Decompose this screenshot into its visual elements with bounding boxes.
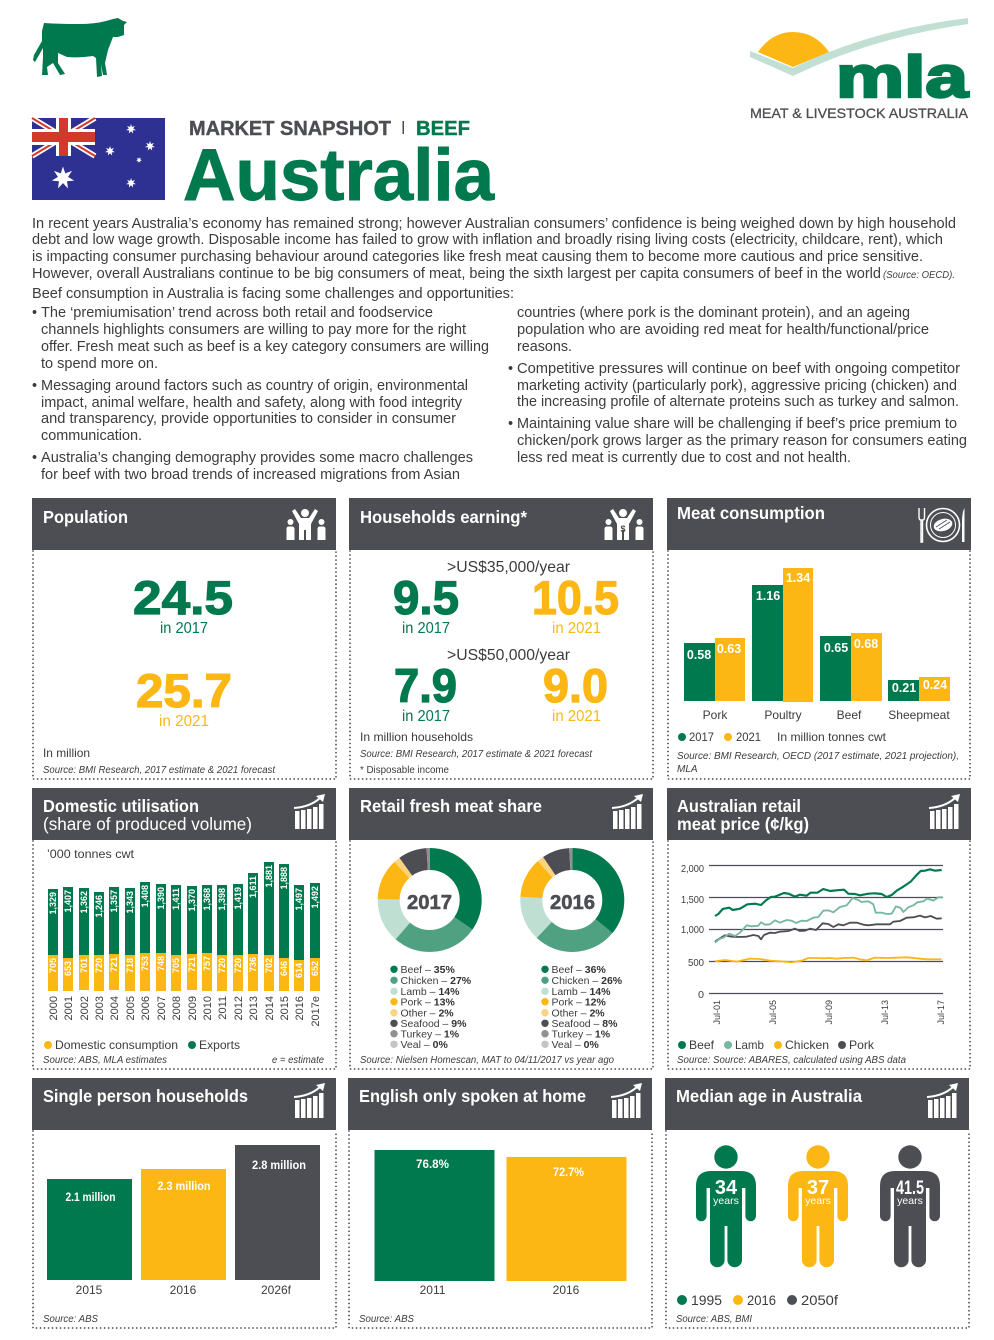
line chart: retail meat prices: Jul-01: [712, 1000, 722, 1025]
source: Source: ABS: [43, 1314, 98, 1325]
legend: 2016: Beef – 36%: [552, 964, 606, 976]
text block: right bullets: Competitive pressures will continue on beef with ongoing competitor: [517, 361, 960, 377]
title: MARKET SNAPSHOT: [189, 118, 391, 140]
text block: right bullets: population who are avoiding red meat for health/functional/price: [517, 322, 929, 338]
stacked bar chart: domestic and exports: [48, 862, 322, 1027]
stacked bar chart: domestic and exports: 1,881: [264, 865, 274, 888]
source: e = estimate: [272, 1055, 324, 1066]
text block: right bullets: countries (where pork is the dominant protein), and an ageing: [517, 305, 910, 321]
legend: 2021: [736, 730, 761, 744]
icon: rising chart: [927, 1083, 958, 1118]
icon: people: [286, 509, 326, 540]
bar chart: households: 2026f: [261, 1283, 292, 1297]
bar chart: meat consumption: 1.34: [786, 571, 810, 585]
source: Source: ABS, MLA estimates: [43, 1055, 167, 1066]
source: MLA: [677, 764, 698, 775]
heading: domestic utilisation: (share of produced volume): [43, 814, 252, 834]
logo: MLA: [750, 18, 969, 121]
stacked bar chart: domestic and exports: 2014: [264, 996, 276, 1020]
legend: 2017: Pork – 13%: [400, 996, 455, 1008]
stacked bar chart: domestic and exports: 757: [202, 956, 212, 971]
legend: In million tonnes cwt: [777, 730, 887, 744]
stacked bar chart: domestic and exports: 2007: [156, 996, 168, 1020]
text block: introduction: [32, 216, 956, 302]
legend: 2016: Other – 2%: [552, 1008, 605, 1020]
legend: [678, 1038, 875, 1052]
line chart: retail meat prices: Jul-09: [824, 1000, 834, 1025]
text block: left bullets: [32, 305, 489, 483]
line chart: retail meat prices: 500: [688, 957, 704, 969]
stats: above US$35,000: [393, 559, 619, 637]
panel: retail fresh meat share: [349, 788, 653, 1069]
icon: rising chart: [294, 794, 325, 829]
stats: above US$35,000: in 2021: [552, 620, 601, 637]
legend: 2017: Lamb – 14%: [400, 986, 460, 998]
stacked bar chart: domestic and exports: 705: [48, 958, 58, 973]
legend: 2017: Veal – 0%: [400, 1039, 448, 1051]
text block: left bullets: Australia’s changing demography provides some macro challenges: [41, 450, 473, 466]
panel: english only spoken at home: [348, 1078, 652, 1328]
line chart: retail meat prices: Jul-17: [936, 1000, 946, 1025]
text block: left bullets: to spend more on.: [41, 356, 158, 372]
stacked bar chart: domestic and exports: 2006: [140, 996, 152, 1020]
stats: above US$50,000: 9.0: [543, 659, 608, 712]
source: [677, 751, 959, 775]
panel: australian retail meat price: [667, 788, 971, 1069]
stacked bar chart: domestic and exports: 702: [264, 958, 274, 973]
text block: left bullets: communication.: [41, 428, 142, 444]
stacked bar chart: domestic and exports: 1,611: [248, 876, 258, 898]
stacked bar chart: domestic and exports: 2002: [79, 996, 91, 1020]
text block: right bullets: •: [508, 361, 513, 377]
donut chart: 2017: 2017: [407, 891, 452, 914]
stacked bar chart: domestic and exports: 2000: [48, 996, 60, 1020]
stacked bar chart: domestic and exports: 1,357: [109, 890, 119, 913]
heading: domestic utilisation: [43, 796, 252, 834]
icon: rising chart: [612, 794, 643, 829]
figure: 2050 median age: years: [897, 1195, 923, 1207]
stacked bar chart: domestic and exports: 1,398: [217, 888, 227, 911]
bar chart: meat consumption: 0.63: [717, 642, 741, 656]
icon: rising chart: [611, 1083, 642, 1118]
line chart: retail meat prices: Jul-05: [768, 1000, 778, 1025]
legend: 2016: [541, 964, 623, 1051]
text block: left bullets: impact, animal welfare, health and safety, along with food integrity: [41, 395, 463, 411]
stacked bar chart: domestic and exports: 2013: [248, 996, 260, 1020]
stacked bar chart: domestic and exports: 2011: [217, 996, 229, 1020]
panel: meat consumption: [667, 498, 971, 779]
bar chart: english only: 2011: [420, 1283, 446, 1297]
text block: left bullets: and transparency, provide opportunities to consider in consumer: [41, 411, 456, 427]
text block: left bullets: Messaging around factors such as country of origin, environmental: [41, 378, 468, 394]
legend: [678, 730, 887, 744]
stacked bar chart: domestic and exports: 646: [279, 961, 289, 976]
legend: Chicken: [785, 1038, 829, 1052]
legend: 2017: Turkey – 1%: [400, 1028, 460, 1040]
text block: introduction: (Source: OECD).: [883, 270, 955, 281]
heading: retail fresh meat share: Retail fresh meat share: [360, 796, 542, 816]
stats: above US$50,000: [394, 647, 608, 725]
stacked bar chart: domestic and exports: 1,362: [79, 891, 89, 914]
unit label: ’000 tonnes cwt: [47, 847, 135, 861]
source: Source: ABS: [359, 1314, 414, 1325]
stacked bar chart: domestic and exports: 2017e: [310, 996, 322, 1027]
stacked bar chart: domestic and exports: 1,368: [202, 888, 212, 911]
figure: 1995 median age: [696, 1145, 756, 1267]
stacked bar chart: domestic and exports: 2015: [279, 996, 291, 1020]
text block: right bullets: chicken/pork grows larger as the primary reason for consumers eating: [517, 433, 967, 449]
text block: introduction: Beef consumption in Australia is facing some challenges and opportunities:: [32, 286, 514, 302]
stacked bar chart: domestic and exports: 718: [125, 958, 135, 973]
donut chart: 2017: [389, 859, 471, 941]
line chart: retail meat prices: 1,000: [681, 924, 704, 936]
stacked bar chart: domestic and exports: 1,419: [233, 887, 243, 910]
text block: right bullets: •: [508, 416, 513, 432]
stacked bar chart: domestic and exports: 1,343: [125, 891, 135, 914]
stats: above US$50,000: >US$50,000/year: [447, 647, 571, 664]
stat: 2021 population: 25.7: [136, 664, 232, 717]
stacked bar chart: domestic and exports: 1,497: [294, 888, 304, 911]
stats: above US$35,000: 10.5: [532, 571, 619, 624]
legend: 2017: [689, 730, 714, 744]
notes and source: In million households: [360, 730, 473, 744]
source: Source: Nielsen Homescan, MAT to 04/11/2017 vs year ago: [360, 1055, 614, 1066]
figure: 2016 median age: [788, 1145, 848, 1267]
legend: 2016: Lamb – 14%: [552, 986, 611, 998]
bar chart: households: [47, 1145, 320, 1297]
icon: people with dollar: $: [620, 524, 626, 534]
text block: left bullets: channels highlights consumers are willing to pay more for the right: [41, 322, 466, 338]
legend: [677, 1292, 838, 1308]
stat: 2017 population: 24.5: [133, 571, 233, 624]
heading: households earning: Households earning*: [360, 507, 527, 527]
note and source: Source: BMI Research, 2017 estimate & 2021 forecast: [43, 765, 276, 776]
heading: retail meat price: meat price (¢/kg): [677, 814, 809, 834]
stacked bar chart: domestic and exports: 753: [140, 956, 150, 971]
figure: 2016 median age: years: [805, 1195, 831, 1207]
legend: Domestic consumption: [55, 1038, 178, 1052]
stacked bar chart: domestic and exports: 1,408: [140, 885, 150, 908]
heading: meat consumption: Meat consumption: [677, 503, 825, 523]
legend: 2017: Seafood – 9%: [400, 1018, 467, 1030]
text block: right bullets: the increasing profile of alternate proteins such as turkey and salmon.: [517, 394, 959, 410]
note and source: [43, 746, 276, 776]
stacked bar chart: domestic and exports: 2001: [63, 996, 75, 1020]
legend: 2016: Chicken – 26%: [552, 975, 623, 987]
bar chart: english only: 72.7%: [553, 1165, 584, 1179]
bar chart: meat consumption: Poultry: [764, 708, 802, 722]
heading: domestic utilisation: Domestic utilisation: [43, 796, 199, 816]
legend: Pork: [849, 1038, 875, 1052]
heading: retail meat price: Australian retail: [677, 796, 801, 816]
panel: households earning: [349, 498, 653, 779]
bar chart: meat consumption: 0.24: [923, 678, 947, 692]
stacked bar chart: domestic and exports: 1,411: [171, 888, 181, 910]
bar chart: meat consumption: 0.65: [824, 641, 848, 655]
panel: domestic utilisation: [32, 788, 336, 1069]
stats: above US$35,000: >US$35,000/year: [447, 559, 571, 576]
panel: single person households: [32, 1078, 336, 1328]
stacked bar chart: domestic and exports: 2016: [294, 996, 306, 1020]
heading: median age: Median age in Australia: [676, 1086, 862, 1106]
line chart: retail meat prices: [681, 863, 946, 1025]
stacked bar chart: domestic and exports: 652: [310, 961, 320, 976]
source: [43, 1055, 324, 1066]
text block: right bullets: reasons.: [517, 339, 572, 355]
legend: 1995: [691, 1292, 722, 1308]
bar chart: meat consumption: 0.21: [892, 681, 916, 695]
figure: 2050 median age: 41.5: [896, 1178, 924, 1199]
heading: english only: English only spoken at home: [359, 1086, 586, 1106]
line chart: retail meat prices: 0: [698, 989, 704, 1001]
text block: left bullets: The ‘premiumisation’ trend across both retail and foodservice: [41, 305, 433, 321]
stacked bar chart: domestic and exports: 720: [217, 958, 227, 973]
bar chart: english only: 76.8%: [416, 1157, 449, 1171]
stacked bar chart: domestic and exports: 736: [248, 957, 258, 972]
text block: introduction: debt and low wage growth. Disposable income has failed to grow with inflation and broadly rising living costs (electricity, childcare, rent), which: [32, 232, 943, 248]
icon: cow silhouette: [33, 18, 127, 77]
source: Source: ABS, BMI: [676, 1314, 752, 1325]
text block: introduction: In recent years Australia’s economy has remained strong; however Australian consumers’ confidence is being weighed down by high household: [32, 216, 956, 232]
figure: 1995 median age: years: [713, 1195, 739, 1207]
notes and source: [360, 730, 593, 776]
panel: population: [32, 498, 336, 779]
heading: population: Population: [43, 507, 128, 527]
stat: 2021 population: in 2021: [159, 713, 209, 730]
heading: retail meat price: [677, 796, 809, 834]
icon: rising chart: [294, 1083, 325, 1118]
text block: left bullets: •: [32, 305, 37, 321]
stacked bar chart: domestic and exports: 614: [294, 963, 304, 978]
legend: 2017: [390, 964, 472, 1051]
bar chart: meat consumption: 1.16: [756, 589, 780, 603]
bar chart: meat consumption: Beef: [837, 708, 862, 722]
bar chart: meat consumption: 0.58: [687, 648, 711, 662]
icon: plate and cutlery: [919, 508, 964, 542]
text block: left bullets: •: [32, 450, 37, 466]
icon: people with dollar: [604, 509, 644, 540]
stacked bar chart: domestic and exports: 1,246: [94, 895, 104, 918]
bar chart: meat consumption: 0.68: [854, 637, 878, 651]
text block: right bullets: marketing activity (particularly pork), aggressive pricing (chicken) and: [517, 378, 957, 394]
figure: 2016 median age: 37: [807, 1177, 829, 1199]
stacked bar chart: domestic and exports: 2005: [125, 996, 137, 1020]
stats: above US$50,000: 7.9: [394, 659, 457, 712]
stacked bar chart: domestic and exports: 705: [171, 958, 181, 973]
text block: right bullets: [508, 305, 967, 466]
note and source: In million: [43, 746, 90, 760]
bar chart: meat consumption: Sheepmeat: [888, 708, 950, 722]
notes and source: * Disposable income: [360, 765, 449, 776]
stacked bar chart: domestic and exports: 721: [109, 957, 119, 972]
title: BEEF: [416, 118, 470, 140]
legend: 2016: Veal – 0%: [552, 1039, 599, 1051]
legend: [44, 1038, 240, 1052]
logo: MLA: mla: [836, 45, 969, 110]
source: Source: Source: ABARES, calculated using ABS data: [677, 1055, 906, 1066]
stacked bar chart: domestic and exports: 653: [63, 961, 73, 976]
icon: rising chart: [929, 794, 960, 829]
legend: 2050f: [801, 1292, 838, 1308]
stacked bar chart: domestic and exports: 2003: [94, 996, 106, 1020]
text block: introduction: However, overall Australians continue to be big consumers of meat, being the sixth largest per capita consumers of beef in the world: [32, 266, 881, 282]
stacked bar chart: domestic and exports: 748: [156, 956, 166, 971]
text block: left bullets: offer. Fresh meat such as beef is a key category consumers are willing: [41, 339, 489, 355]
notes and source: Source: BMI Research, 2017 estimate & 2021 forecast: [360, 749, 593, 760]
text block: introduction: is impacting consumer purchasing behaviour around categories like fresh meat causing them to become more cautious and price sensitive.: [32, 249, 923, 265]
line chart: retail meat prices: 1,500: [681, 894, 704, 906]
source: Source: BMI Research, OECD (2017 estimate, 2021 projection),: [677, 751, 959, 762]
stacked bar chart: domestic and exports: 2008: [171, 996, 183, 1020]
donut chart: 2016: [531, 859, 613, 941]
legend: 2016: Pork – 12%: [552, 996, 606, 1008]
stats: above US$50,000: in 2021: [552, 708, 601, 725]
bar chart: households: 2.8 million: [252, 1158, 306, 1172]
text block: left bullets: •: [32, 378, 37, 394]
figure: 2050 median age: [880, 1145, 940, 1267]
stacked bar chart: domestic and exports: 2009: [187, 996, 199, 1020]
stacked bar chart: domestic and exports: 1,390: [156, 887, 166, 910]
legend: 2017: Chicken – 27%: [400, 975, 472, 987]
legend: 2016: [747, 1292, 776, 1308]
bar chart: meat consumption: Pork: [703, 708, 728, 722]
figure: 1995 median age: 34: [715, 1177, 738, 1199]
text block: right bullets: less red meat is currently due to cost and not health.: [517, 450, 851, 466]
icon: Australian flag: [32, 118, 165, 200]
heading: single person households: Single person households: [43, 1086, 248, 1106]
bar chart: households: 2.1 million: [66, 1190, 116, 1204]
bar chart: households: 2.3 million: [158, 1179, 210, 1193]
stacked bar chart: domestic and exports: 720: [233, 958, 243, 973]
logo: MLA: MEAT & LIVESTOCK AUSTRALIA: [750, 105, 969, 121]
legend: Beef: [689, 1038, 715, 1052]
bar chart: households: 2015: [76, 1283, 103, 1297]
stacked bar chart: domestic and exports: 1,407: [63, 890, 73, 913]
stacked bar chart: domestic and exports: 701: [79, 958, 89, 973]
legend: Exports: [199, 1038, 240, 1052]
bar chart: english only: 2016: [553, 1283, 580, 1297]
stacked bar chart: domestic and exports: 1,492: [310, 886, 320, 909]
bar chart: households: 2016: [170, 1283, 197, 1297]
stats: above US$35,000: in 2017: [402, 620, 450, 637]
stats: above US$35,000: 9.5: [393, 571, 459, 624]
stacked bar chart: domestic and exports: 2012: [233, 996, 245, 1020]
legend: Lamb: [735, 1038, 764, 1052]
panel: median age: [665, 1078, 969, 1328]
legend: 2017: Beef – 35%: [400, 964, 455, 976]
line chart: retail meat prices: Jul-13: [880, 1000, 890, 1025]
stacked bar chart: domestic and exports: 1,370: [187, 889, 197, 912]
stacked bar chart: domestic and exports: 2010: [202, 996, 214, 1020]
stacked bar chart: domestic and exports: 1,329: [48, 892, 58, 915]
donut chart: 2016: 2016: [550, 891, 595, 914]
stats: above US$50,000: in 2017: [402, 708, 450, 725]
stacked bar chart: domestic and exports: 2004: [109, 996, 121, 1020]
bar chart: english only: [374, 1150, 626, 1297]
stacked bar chart: domestic and exports: 1,888: [279, 867, 289, 890]
text block: right bullets: Maintaining value share will be challenging if beef’s price premium to: [517, 416, 957, 432]
text block: left bullets: for beef with two broad trends of increased migrations from Asian: [41, 467, 460, 483]
stacked bar chart: domestic and exports: 720: [94, 958, 104, 973]
legend: 2017: Other – 2%: [400, 1008, 454, 1020]
legend: 2016: Seafood – 8%: [552, 1018, 618, 1030]
line chart: retail meat prices: 2,000: [681, 863, 704, 875]
bar chart: meat consumption: [684, 568, 950, 722]
title: Australia: [183, 135, 495, 216]
stat: 2017 population: in 2017: [160, 620, 208, 637]
stacked bar chart: domestic and exports: 721: [187, 957, 197, 972]
legend: 2016: Turkey – 1%: [552, 1028, 611, 1040]
